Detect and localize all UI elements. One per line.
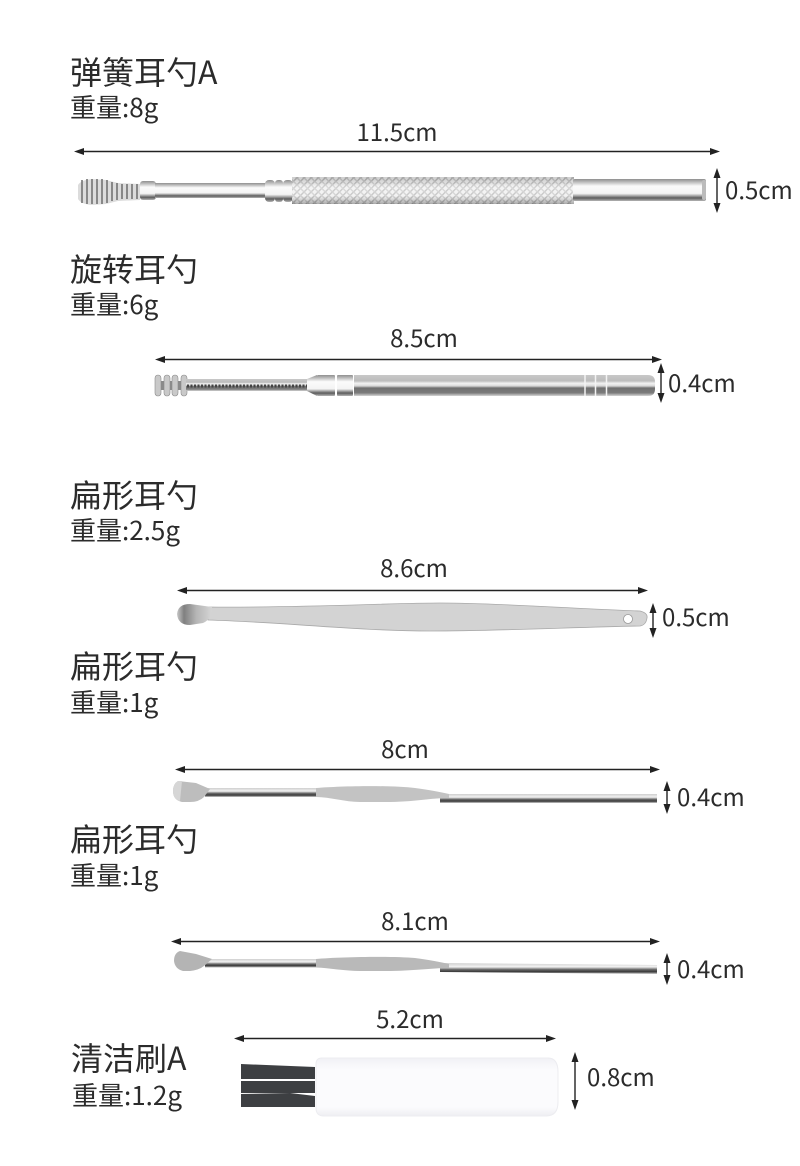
panel: rotating ear spoon xyxy=(70,245,736,403)
weight: 重量:8g xyxy=(70,88,159,125)
length label: 8.6cm xyxy=(380,549,448,584)
weight: 重量:1g xyxy=(70,683,159,720)
length arrow xyxy=(175,766,660,773)
diameter label: 0.4cm xyxy=(668,364,736,399)
cleaning brush xyxy=(241,1058,558,1116)
length label: 8cm xyxy=(381,730,429,765)
heading: 旋转耳勺 xyxy=(70,245,198,291)
heading: 弹簧耳勺A xyxy=(70,48,218,94)
length label: 8.1cm xyxy=(381,902,449,937)
diameter arrow xyxy=(650,603,656,638)
diameter arrow xyxy=(664,781,670,814)
panel: cleaning brush A xyxy=(71,1000,655,1116)
bristles xyxy=(241,1064,315,1107)
weight: 重量:6g xyxy=(70,285,159,322)
heading: 扁形耳勺 xyxy=(70,815,198,861)
length label: 8.5cm xyxy=(390,319,458,354)
diameter label: 0.5cm xyxy=(725,171,793,206)
rotating spoon tool xyxy=(155,375,655,396)
diameter label: 0.4cm xyxy=(677,950,745,985)
diameter label: 0.4cm xyxy=(677,778,745,813)
panel: spring ear spoon A xyxy=(70,48,793,213)
weight: 重量:1.2g xyxy=(72,1076,182,1113)
diameter label: 0.5cm xyxy=(662,598,730,633)
diameter arrow xyxy=(572,1052,578,1110)
length arrow xyxy=(171,938,660,945)
length label: 5.2cm xyxy=(376,1000,444,1035)
flat spoon tool xyxy=(177,603,647,631)
heading: 清洁刷A xyxy=(71,1034,187,1080)
diameter arrow xyxy=(714,168,720,213)
length arrow xyxy=(234,1035,556,1042)
slim spoon tool xyxy=(173,781,657,803)
weight: 重量:2.5g xyxy=(70,511,180,548)
panel: flat ear spoon 1g first xyxy=(70,642,745,814)
length arrow xyxy=(177,587,648,594)
panel: flat ear spoon 1g second xyxy=(70,815,745,985)
length arrow xyxy=(74,148,720,155)
slim spoon tool xyxy=(174,951,657,974)
weight: 重量:1g xyxy=(70,856,159,893)
heading: 扁形耳勺 xyxy=(70,642,198,688)
length arrow xyxy=(155,356,662,363)
length label: 11.5cm xyxy=(356,113,438,148)
diameter arrow xyxy=(658,363,664,403)
diameter label: 0.8cm xyxy=(587,1058,655,1093)
panel: flat ear spoon 2.5g xyxy=(70,471,730,638)
spring spoon tool xyxy=(78,177,706,205)
heading: 扁形耳勺 xyxy=(70,471,198,517)
diameter arrow xyxy=(664,953,670,985)
white handle xyxy=(316,1058,558,1116)
